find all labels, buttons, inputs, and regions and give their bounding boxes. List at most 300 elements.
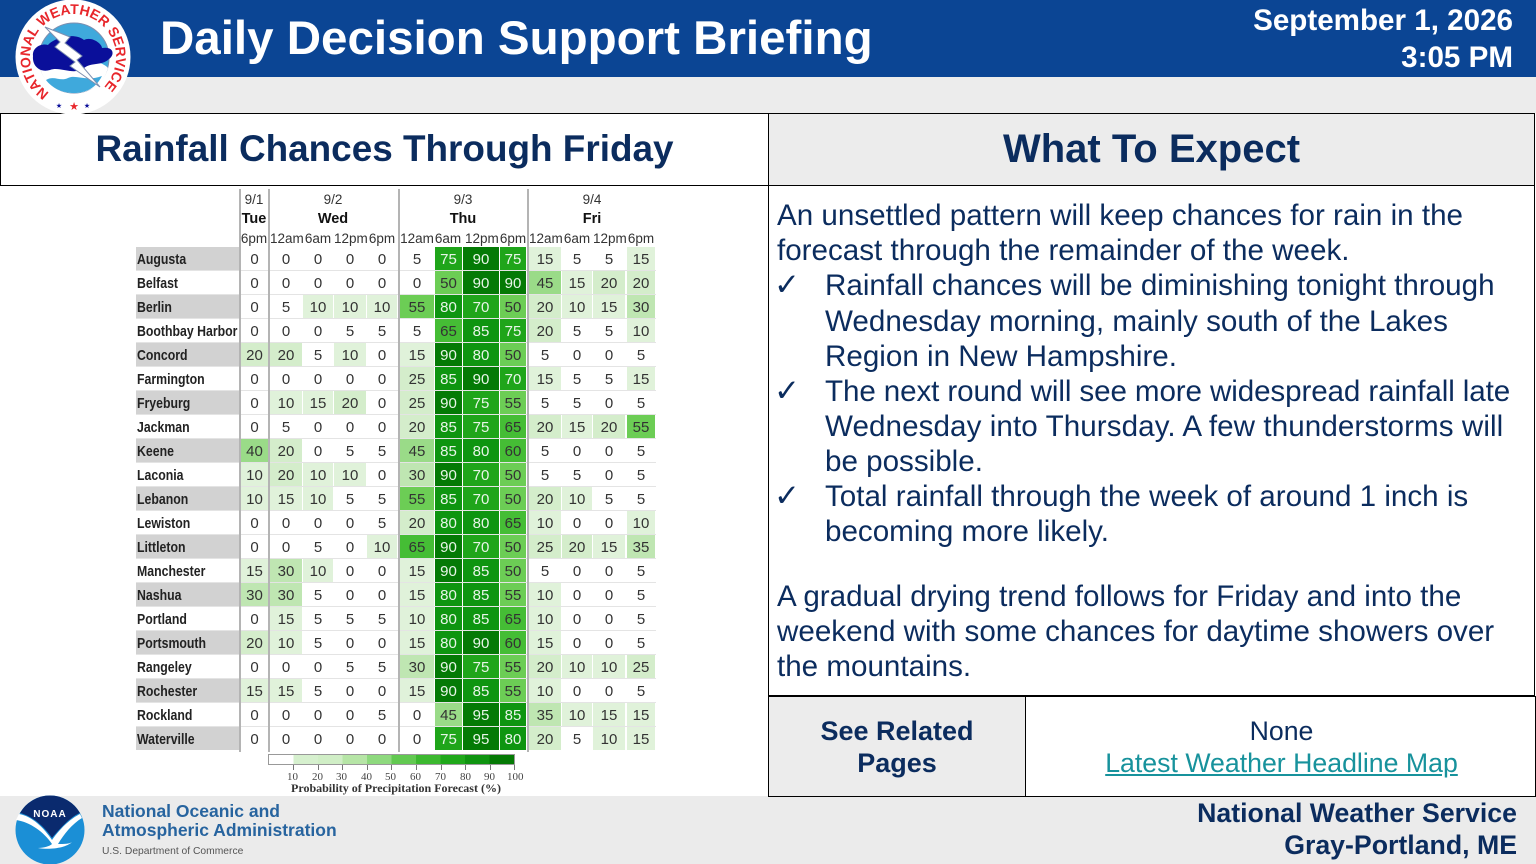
table rows: 0 [413, 275, 421, 292]
table rows: 10 [310, 467, 326, 484]
table rows: 0 [282, 323, 290, 340]
bullet 1: Region in New Hampshire. [825, 340, 1177, 373]
table rows: 0 [378, 251, 386, 268]
table rows: 5 [573, 251, 581, 268]
table rows: 0 [346, 731, 354, 748]
table rows: 5 [378, 659, 386, 676]
table rows: 0 [413, 707, 421, 724]
table rows: 5 [378, 611, 386, 628]
table rows: 0 [378, 395, 386, 412]
office name: Gray-Portland, ME [1284, 830, 1517, 860]
table rows: Berlin [137, 299, 172, 316]
table rows: 10 [569, 659, 585, 676]
table rows: 5 [637, 347, 645, 364]
table rows: 30 [633, 299, 649, 316]
related pages links: Latest Weather Headline Map [1105, 748, 1458, 778]
table rows: 15 [278, 611, 294, 628]
table rows: 5 [346, 323, 354, 340]
table rows: 0 [378, 467, 386, 484]
table rows: 5 [282, 299, 290, 316]
panel: rainfall probability table [0, 186, 768, 796]
office name: National Weather Service [1197, 798, 1517, 828]
table rows: 10 [633, 323, 649, 340]
table rows: 0 [314, 659, 322, 676]
table rows: 50 [505, 467, 521, 484]
table rows: 20 [537, 731, 553, 748]
table rows: 90 [440, 539, 457, 556]
table rows: 0 [605, 563, 613, 580]
table header: dates, days and times: 9/3 [454, 192, 472, 207]
table header: dates, days and times: 6pm [628, 231, 654, 246]
bullet 2: The next round will see more widespread rainfall late [825, 375, 1510, 408]
table rows: 75 [473, 395, 489, 412]
table rows: 5 [378, 515, 386, 532]
table rows: 70 [473, 539, 489, 556]
table rows: 90 [440, 467, 457, 484]
table rows: 0 [250, 539, 259, 556]
date and time: September 1, 2026 [1253, 4, 1513, 37]
bullet 3: Total rainfall through the week of around 1 inch is [825, 480, 1468, 513]
table rows: 30 [278, 587, 294, 604]
table rows: 0 [605, 587, 613, 604]
table rows: 20 [601, 419, 617, 436]
table rows: 10 [342, 299, 358, 316]
table rows: 0 [314, 251, 322, 268]
table rows [136, 189, 656, 752]
table rows: 90 [440, 683, 457, 700]
table rows: 20 [278, 443, 294, 460]
table rows: 5 [573, 467, 581, 484]
table rows: Lebanon [137, 491, 188, 508]
table rows: 20 [409, 419, 425, 436]
table rows: 45 [440, 707, 457, 724]
table rows: Augusta [137, 251, 186, 268]
table rows: 95 [473, 731, 489, 748]
table header: dates, days and times: 6pm [500, 231, 526, 246]
table rows: 5 [346, 443, 354, 460]
table rows: 0 [250, 323, 259, 340]
bullet 2: Wednesday into Thursday. A few thunderstorms will [825, 410, 1503, 443]
table header: dates, days and times [241, 192, 654, 246]
table rows: 0 [346, 371, 354, 388]
table rows: 50 [440, 275, 457, 292]
table rows: 10 [310, 491, 326, 508]
table rows: 10 [310, 299, 326, 316]
table rows: 0 [378, 683, 386, 700]
legend: probability of precipitation: Probability of Precipitation Forecast (%) [291, 781, 501, 795]
table rows: 65 [440, 323, 457, 340]
icon: NWS logo: ★ [69, 100, 79, 113]
table rows: 5 [541, 467, 549, 484]
bullet 3 [825, 480, 1468, 548]
table rows: 5 [605, 251, 613, 268]
table rows: 0 [573, 563, 581, 580]
footer bar [0, 796, 1536, 864]
table rows: 80 [440, 587, 457, 604]
table rows: 0 [346, 419, 354, 436]
table rows: Rangeley [137, 659, 192, 676]
table rows: 5 [314, 347, 322, 364]
table rows: 55 [409, 299, 425, 316]
table header: dates, days and times: 6am [564, 231, 590, 246]
table rows: Portland [137, 611, 187, 628]
table rows: 5 [637, 635, 645, 652]
date and time [1253, 4, 1513, 74]
table header: dates, days and times: 12am [400, 231, 434, 246]
table rows: 0 [573, 611, 581, 628]
table rows: 0 [282, 659, 290, 676]
table rows: Waterville [137, 731, 195, 748]
table rows: 70 [473, 299, 489, 316]
see related pages label: Pages [857, 748, 937, 778]
icon: NWS logo: ★ [84, 102, 90, 110]
table rows: 5 [573, 731, 581, 748]
check mark 1: ✓ [774, 267, 800, 303]
closing paragraph: weekend with some chances for daytime showers over [777, 615, 1494, 648]
table rows: 0 [314, 707, 322, 724]
table rows: 95 [473, 707, 489, 724]
table rows: 55 [409, 491, 425, 508]
table rows: 15 [569, 419, 585, 436]
table rows: 0 [573, 443, 581, 460]
check mark 2: ✓ [774, 373, 800, 409]
table rows: 0 [250, 659, 259, 676]
table rows: 0 [250, 275, 259, 292]
table rows: 60 [505, 635, 521, 652]
table rows: 0 [282, 251, 290, 268]
table rows: 5 [605, 371, 613, 388]
table rows: 30 [409, 659, 425, 676]
table rows: 0 [605, 347, 613, 364]
icon: NWS logo: ★ [56, 102, 62, 110]
table rows: 5 [637, 563, 645, 580]
related pages links [1025, 696, 1536, 797]
table rows: Rochester [137, 683, 197, 700]
table rows: 0 [605, 467, 613, 484]
table rows: Nashua [137, 587, 181, 604]
table rows: 10 [601, 731, 617, 748]
table rows: 5 [637, 491, 645, 508]
table rows: 85 [440, 419, 457, 436]
table rows: 5 [314, 539, 322, 556]
table rows: Portsmouth [137, 635, 206, 652]
table rows: 10 [342, 347, 358, 364]
table rows: 15 [409, 587, 425, 604]
table rows: 55 [505, 659, 521, 676]
bullet 1: Rainfall chances will be diminishing tonight through [825, 269, 1495, 302]
table header: dates, days and times: 6am [435, 231, 461, 246]
table rows: 10 [569, 491, 585, 508]
table rows: 10 [342, 467, 358, 484]
table header: dates, days and times: Wed [318, 211, 348, 227]
table rows: 20 [342, 395, 358, 412]
legend: probability of precipitation: 40 [361, 771, 372, 783]
table rows: 55 [633, 419, 649, 436]
table rows: 0 [250, 731, 259, 748]
table rows: 15 [278, 683, 294, 700]
table rows: 5 [282, 419, 290, 436]
table rows: 50 [505, 299, 521, 316]
table rows: 85 [505, 707, 521, 724]
table rows: 15 [633, 251, 649, 268]
table rows: 75 [505, 251, 521, 268]
table rows: 30 [409, 467, 425, 484]
panel: what to expect text [768, 185, 1535, 696]
intro paragraph: forecast through the remainder of the week. [777, 234, 1349, 267]
legend: probability of precipitation: 20 [312, 771, 323, 783]
table rows: 10 [246, 491, 263, 508]
table rows: 0 [250, 371, 259, 388]
legend: probability of precipitation: 70 [435, 771, 446, 783]
grey band [0, 77, 1536, 113]
table header: dates, days and times: 9/2 [324, 192, 342, 207]
table rows: 0 [346, 587, 354, 604]
table rows: 20 [278, 467, 294, 484]
table rows: 10 [537, 515, 553, 532]
table rows: 25 [409, 395, 425, 412]
table rows: Concord [137, 347, 188, 364]
table rows: 35 [537, 707, 553, 724]
intro paragraph [777, 199, 1463, 267]
legend: probability of precipitation: 60 [410, 771, 421, 783]
table rows: 0 [250, 515, 259, 532]
NOAA wordmark [102, 800, 337, 856]
table rows: 15 [246, 563, 263, 580]
table rows: 5 [605, 323, 613, 340]
table rows: 45 [409, 443, 425, 460]
table rows: 15 [409, 683, 425, 700]
table rows: 0 [282, 515, 290, 532]
table rows: 5 [346, 491, 354, 508]
table rows: 0 [282, 539, 290, 556]
legend: probability of precipitation: 50 [385, 771, 396, 783]
see related pages label: See Related [820, 716, 974, 746]
panel heading: what to expect [768, 113, 1535, 186]
icon: NOAA logo [16, 796, 84, 864]
table rows: 5 [346, 611, 354, 628]
table rows: 50 [505, 491, 521, 508]
table rows: 65 [505, 611, 521, 628]
table rows: 0 [314, 371, 322, 388]
table rows: 90 [440, 563, 457, 580]
table rows: 0 [378, 347, 386, 364]
table rows: 75 [505, 323, 521, 340]
table rows: 10 [374, 539, 390, 556]
table rows: 0 [250, 299, 259, 316]
table rows: 90 [473, 371, 489, 388]
table rows: 0 [378, 371, 386, 388]
see related pages label [768, 696, 1026, 797]
table rows: 80 [505, 731, 521, 748]
table rows: 90 [473, 275, 489, 292]
table rows: 25 [409, 371, 425, 388]
legend: probability of precipitation: 30 [336, 771, 347, 783]
table rows: 90 [440, 659, 457, 676]
table rows: 5 [637, 395, 645, 412]
table rows: 0 [573, 587, 581, 604]
table rows: 55 [505, 587, 521, 604]
table rows: 15 [601, 299, 617, 316]
closing paragraph: A gradual drying trend follows for Friday and into the [777, 580, 1461, 613]
table rows: Jackman [137, 419, 190, 436]
legend: probability of precipitation: 10 [287, 771, 298, 783]
table rows: 0 [573, 683, 581, 700]
table rows: 55 [505, 683, 521, 700]
bullet 3: becoming more likely. [825, 515, 1109, 548]
table rows: 0 [605, 515, 613, 532]
table rows: 20 [278, 347, 294, 364]
table rows: 15 [537, 371, 553, 388]
table header: dates, days and times: 9/4 [583, 192, 601, 207]
table header: dates, days and times: 12am [529, 231, 563, 246]
table rows: 50 [505, 347, 521, 364]
table rows: 85 [440, 371, 457, 388]
table rows: 15 [278, 491, 294, 508]
table rows: 0 [314, 515, 322, 532]
table rows: 15 [409, 635, 425, 652]
table rows: 80 [440, 299, 457, 316]
table header: dates, days and times: 9/1 [245, 192, 263, 207]
table rows: 20 [537, 419, 553, 436]
table rows: 90 [440, 395, 457, 412]
table rows: 0 [378, 731, 386, 748]
table rows: 0 [573, 635, 581, 652]
table rows: 80 [440, 611, 457, 628]
table rows: 0 [378, 563, 386, 580]
table rows: 85 [473, 563, 489, 580]
table rows: 0 [250, 395, 259, 412]
table rows: Rockland [137, 707, 192, 724]
table rows: 0 [573, 347, 581, 364]
table rows: 5 [413, 323, 421, 340]
table rows: 20 [633, 275, 649, 292]
table rows: 5 [378, 491, 386, 508]
table rows: 0 [605, 611, 613, 628]
NOAA wordmark: Atmospheric Administration [102, 820, 337, 840]
table rows: 10 [278, 395, 294, 412]
table rows: 5 [378, 323, 386, 340]
table rows: 5 [314, 611, 322, 628]
table rows: Lewiston [137, 515, 190, 532]
table rows: 5 [573, 323, 581, 340]
header bar [0, 0, 1536, 77]
table rows: Belfast [137, 275, 178, 292]
table rows: Keene [137, 443, 174, 460]
legend: probability of precipitation: 90 [484, 771, 495, 783]
table rows: 80 [473, 515, 489, 532]
table rows: 20 [537, 491, 553, 508]
table rows: 5 [314, 683, 322, 700]
check mark 3: ✓ [774, 478, 800, 514]
table rows: 5 [541, 347, 549, 364]
table rows: 85 [440, 491, 457, 508]
table rows: 5 [637, 467, 645, 484]
legend: probability of precipitation: 100 [507, 771, 524, 783]
bullet 1 [825, 269, 1495, 373]
table rows: 5 [605, 491, 613, 508]
table rows: 0 [346, 515, 354, 532]
table rows: Littleton [137, 539, 186, 556]
table rows: 65 [505, 515, 521, 532]
bullet 1: Wednesday morning, mainly south of the Lakes [825, 305, 1448, 338]
table rows: 0 [413, 731, 421, 748]
table rows: 0 [314, 731, 322, 748]
table rows: Farmington [137, 371, 205, 388]
table rows: 10 [374, 299, 390, 316]
table rows: 5 [378, 707, 386, 724]
table rows: 80 [473, 443, 489, 460]
table rows: 0 [346, 563, 354, 580]
NOAA wordmark: National Oceanic and [102, 800, 280, 820]
table rows: 10 [310, 563, 326, 580]
table rows: 80 [473, 347, 489, 364]
table rows: 0 [378, 635, 386, 652]
legend: probability of precipitation [268, 754, 524, 795]
title: Daily Decision Support Briefing [160, 12, 873, 65]
table rows: 0 [282, 371, 290, 388]
table rows: Laconia [137, 467, 183, 484]
table rows: 75 [440, 731, 457, 748]
table rows: 20 [246, 347, 263, 364]
NOAA wordmark: U.S. Department of Commerce [102, 846, 243, 856]
icon: NWS logo: NATIONAL WEATHER SERVICE [20, 4, 126, 100]
icon: NOAA logo: NOAA [33, 809, 67, 820]
table rows: 30 [246, 587, 263, 604]
table header: dates, days and times: Tue [242, 211, 266, 227]
table rows: 5 [637, 443, 645, 460]
table rows: 15 [601, 707, 617, 724]
table rows: 20 [569, 539, 585, 556]
table rows: 0 [346, 707, 354, 724]
table rows: 90 [440, 347, 457, 364]
table rows: 15 [409, 563, 425, 580]
table rows: 0 [250, 419, 259, 436]
table rows: 10 [537, 587, 553, 604]
table header: dates, days and times: 6am [305, 231, 331, 246]
bullet 2 [825, 375, 1510, 478]
table rows: 0 [314, 443, 322, 460]
table rows: 20 [537, 299, 553, 316]
table rows: 0 [346, 275, 354, 292]
table rows: 15 [633, 371, 649, 388]
table header: dates, days and times: 12pm [593, 231, 627, 246]
table rows: 50 [505, 539, 521, 556]
table rows: 10 [569, 707, 585, 724]
table rows: 0 [314, 323, 322, 340]
table rows: 0 [378, 275, 386, 292]
table rows: 10 [633, 515, 649, 532]
intro paragraph: An unsettled pattern will keep chances for rain in the [777, 199, 1463, 232]
table rows: 5 [346, 659, 354, 676]
table rows: 5 [637, 587, 645, 604]
table rows: 10 [246, 467, 263, 484]
table rows: 10 [278, 635, 294, 652]
table rows: 0 [378, 419, 386, 436]
table rows: 5 [413, 251, 421, 268]
panel heading: what to expect: What To Expect [1003, 127, 1300, 171]
table rows: 85 [473, 611, 489, 628]
table rows: 5 [541, 443, 549, 460]
office name [1197, 798, 1517, 860]
related pages links: None [1250, 716, 1313, 746]
table rows: 10 [409, 611, 425, 628]
table rows: 0 [346, 683, 354, 700]
table rows: 85 [440, 443, 457, 460]
table header: dates, days and times: Thu [450, 211, 476, 227]
table rows: 0 [573, 515, 581, 532]
table rows: 75 [440, 251, 457, 268]
table rows: 90 [505, 275, 521, 292]
